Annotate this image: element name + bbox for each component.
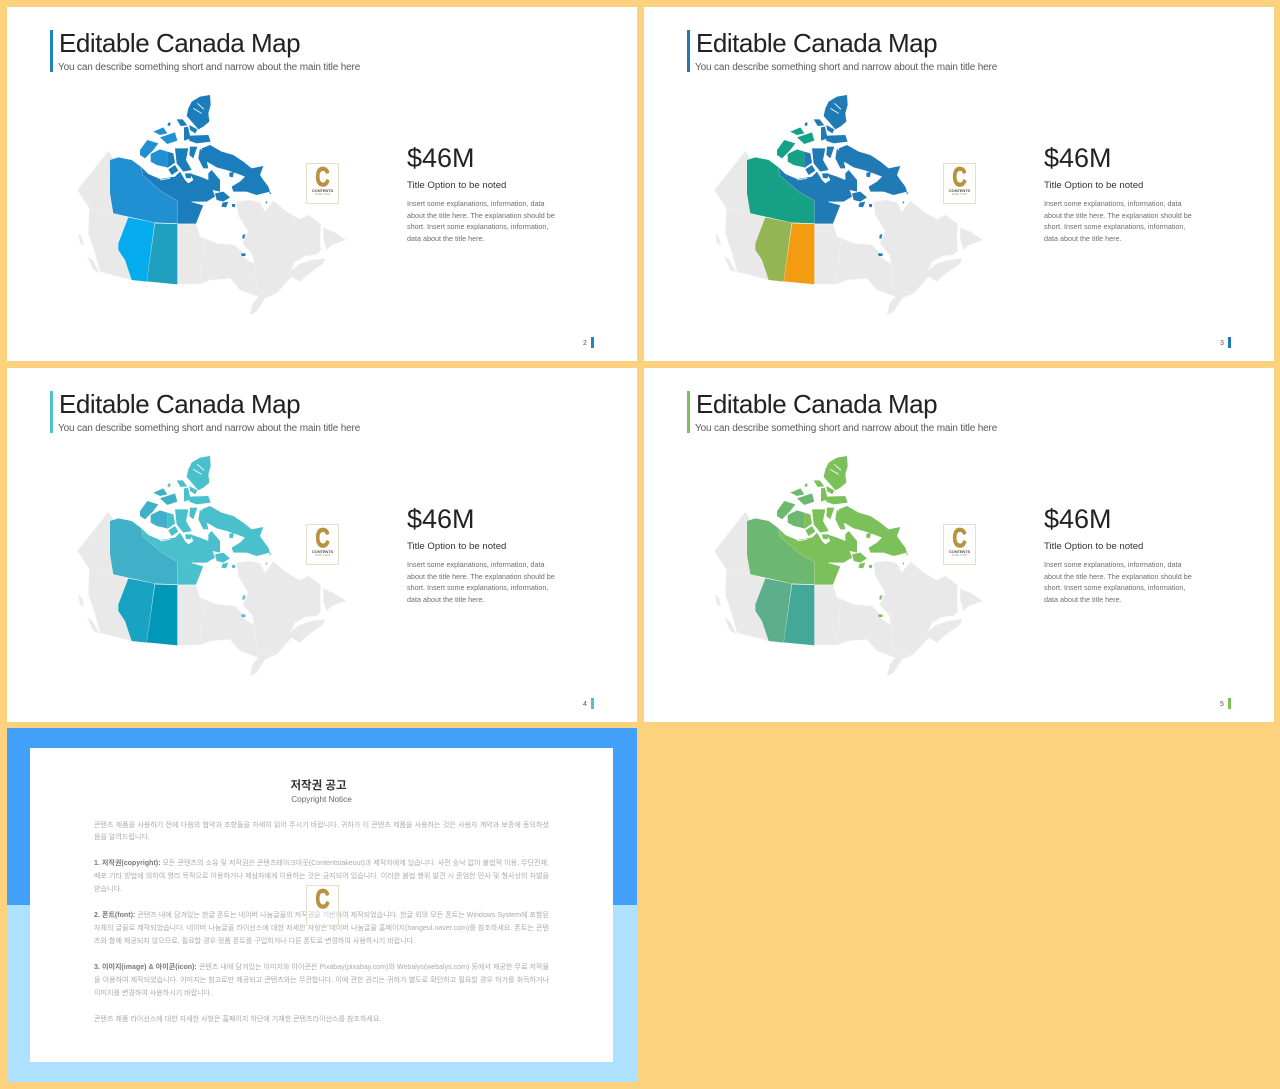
map: Canada green (714, 456, 983, 676)
notice body text: 을 이용하여 제작되었습니다. 이미지는 참고로만 제공되고 콘텐츠와는 무관합니다. 이에 관한 권리는 귀하가 별도로 확인하고 필요할 경우 허가를 취득하거나 (94, 977, 549, 984)
logo (306, 524, 339, 565)
logo watermark (306, 885, 339, 926)
notice body text: 자체의 글꼴로 제작되었습니다. 네이버 나눔글꼴 라이선스에 대한 자세한 사항은 네이버 나눔글꼴 홈페이지(hangeul.naver.com)를 참조하세요. 폰트는 콘텐 (94, 925, 549, 932)
description: short. Insert some explanations, information, (1044, 222, 1185, 231)
logo (943, 524, 976, 565)
logo: CONTENTS (312, 188, 333, 193)
logo: MAKE YOUR (315, 193, 330, 196)
page marker (1228, 337, 1231, 348)
notice body text (94, 821, 549, 1023)
title: Editable Canada Map (59, 389, 300, 419)
notice body text: 콘텐츠 제품을 사용하기 전에 다음의 협약과 조항들을 자세히 읽어 주시기 바랍니다. 귀하가 이 콘텐츠 제품을 사용하는 것은 사용자 계약과 보증에 동의하셨 (94, 822, 549, 829)
description: short. Insert some explanations, information, (407, 583, 548, 592)
description: Insert some explanations, information, data (407, 560, 544, 569)
notice heading: 저작권 공고 (290, 780, 347, 792)
description: Insert some explanations, information, data (1044, 560, 1181, 569)
page number: 3 (1220, 340, 1224, 347)
logo: MAKE YOUR (315, 554, 330, 557)
description: data about the title here. (1044, 594, 1122, 604)
white notice card (30, 748, 613, 1062)
logo: CONTENTS (949, 188, 970, 193)
notice body text: 배포 기타 방법에 의하여 영리 목적으로 이용하거나 제삼자에게 이용하는 것은 금지되어 있습니다. 이러한 불법 행위 발견 시 준엄한 민사 및 형사상의 처벌을 (94, 873, 549, 880)
accent bar (50, 391, 52, 433)
subtitle: You can describe something short and narrow about the main title here (695, 62, 997, 73)
notice body text: 2. 폰트(font): 콘텐츠 내에 담겨있는 한글 폰트는 네이버 나눔글꼴의 저작권을 기반하여 제작되었습니다. 한글 외의 모든 폰트는 Windows System에 포함된 (94, 912, 549, 919)
map: Canada multicolour (714, 95, 983, 315)
description: about the title here. The explanation should be (407, 210, 555, 220)
option title: Title Option to be noted (407, 180, 506, 191)
notice body text: 음을 알려드립니다. (94, 834, 150, 841)
description: data about the title here. (407, 234, 485, 242)
option title: Title Option to be noted (407, 541, 506, 552)
title: Editable Canada Map (59, 28, 300, 58)
panel: slide 5 green map (644, 368, 1274, 722)
value: $46M (1044, 504, 1112, 534)
description: data about the title here. (1044, 234, 1122, 242)
description: short. Insert some explanations, information, (407, 222, 548, 231)
description: about the title here. The explanation should be (1044, 572, 1192, 580)
notice body text: 1. 저작권(copyright): 모든 콘텐츠의 소유 및 저작권은 콘텐츠테이크아웃(Contentstakeout)과 제작자에게 있습니다. 사전 승낙 없이 불법적 이용, 무단전재, (94, 860, 549, 867)
notice body text: 콘텐츠 제품 라이선스에 대한 자세한 사항은 홈페이지 하단에 기재한 콘텐츠라이선스를 참조하세요. (94, 1016, 381, 1023)
value: $46M (407, 504, 475, 534)
description: Insert some explanations, information, data (1044, 199, 1181, 208)
notice body text: 이미지를 변경하여 사용하시기 바랍니다. (94, 990, 212, 997)
panel: slide 4 teal map (7, 368, 637, 722)
value: $46M (1044, 143, 1112, 173)
accent bar (50, 30, 52, 72)
subtitle: You can describe something short and narrow about the main title here (695, 423, 997, 434)
logo (943, 163, 976, 204)
description: about the title here. The explanation should be (407, 572, 555, 580)
title: Editable Canada Map (696, 389, 937, 419)
description (407, 199, 555, 242)
description: short. Insert some explanations, information, (1044, 583, 1185, 592)
notice body text: 3. 이미지(image) & 아이콘(icon): 콘텐츠 내에 담겨있는 이미지와 아이콘은 Pixabay(pixabay.com)와 Webalys(webalys.com) 등에서 제공한 무료 저작물 (94, 964, 549, 971)
logo: CONTENTS (312, 549, 333, 554)
logo (306, 163, 339, 204)
logo: MAKE YOUR (952, 193, 967, 196)
description: data about the title here. (407, 594, 485, 604)
panel: copyright notice (7, 728, 637, 1082)
page number: 4 (583, 701, 587, 708)
accent bar (687, 391, 690, 433)
accent bar (687, 30, 690, 72)
page marker (591, 337, 594, 348)
panel: slide 3 multicolour map (644, 7, 1274, 361)
description: Insert some explanations, information, data (407, 199, 544, 208)
description (407, 560, 555, 604)
option title: Title Option to be noted (1044, 180, 1143, 191)
page marker (1228, 698, 1231, 709)
notice subheading: Copyright Notice (291, 795, 352, 804)
value: $46M (407, 143, 475, 173)
logo: MAKE YOUR (952, 554, 967, 557)
option title: Title Option to be noted (1044, 541, 1143, 552)
subtitle: You can describe something short and narrow about the main title here (58, 62, 360, 73)
logo: CONTENTS (949, 549, 970, 554)
notice body text: 츠와 함께 제공되지 않으므로, 필요할 경우 정품 폰트를 구입하거나 다른 폰트로 변경하여 사용하시기 바랍니다. (94, 938, 415, 945)
page marker (591, 698, 594, 709)
page number: 5 (1220, 701, 1224, 708)
title: Editable Canada Map (696, 28, 937, 58)
subtitle: You can describe something short and narrow about the main title here (58, 423, 360, 434)
notice body text: 받습니다. (94, 886, 122, 893)
page number: 2 (583, 340, 587, 347)
panel: slide 2 blue map (7, 7, 637, 361)
description (1044, 560, 1192, 604)
map: Canada teal (78, 456, 346, 676)
map: Canada blue (78, 95, 346, 315)
description (1044, 199, 1192, 242)
description: about the title here. The explanation should be (1044, 210, 1192, 220)
